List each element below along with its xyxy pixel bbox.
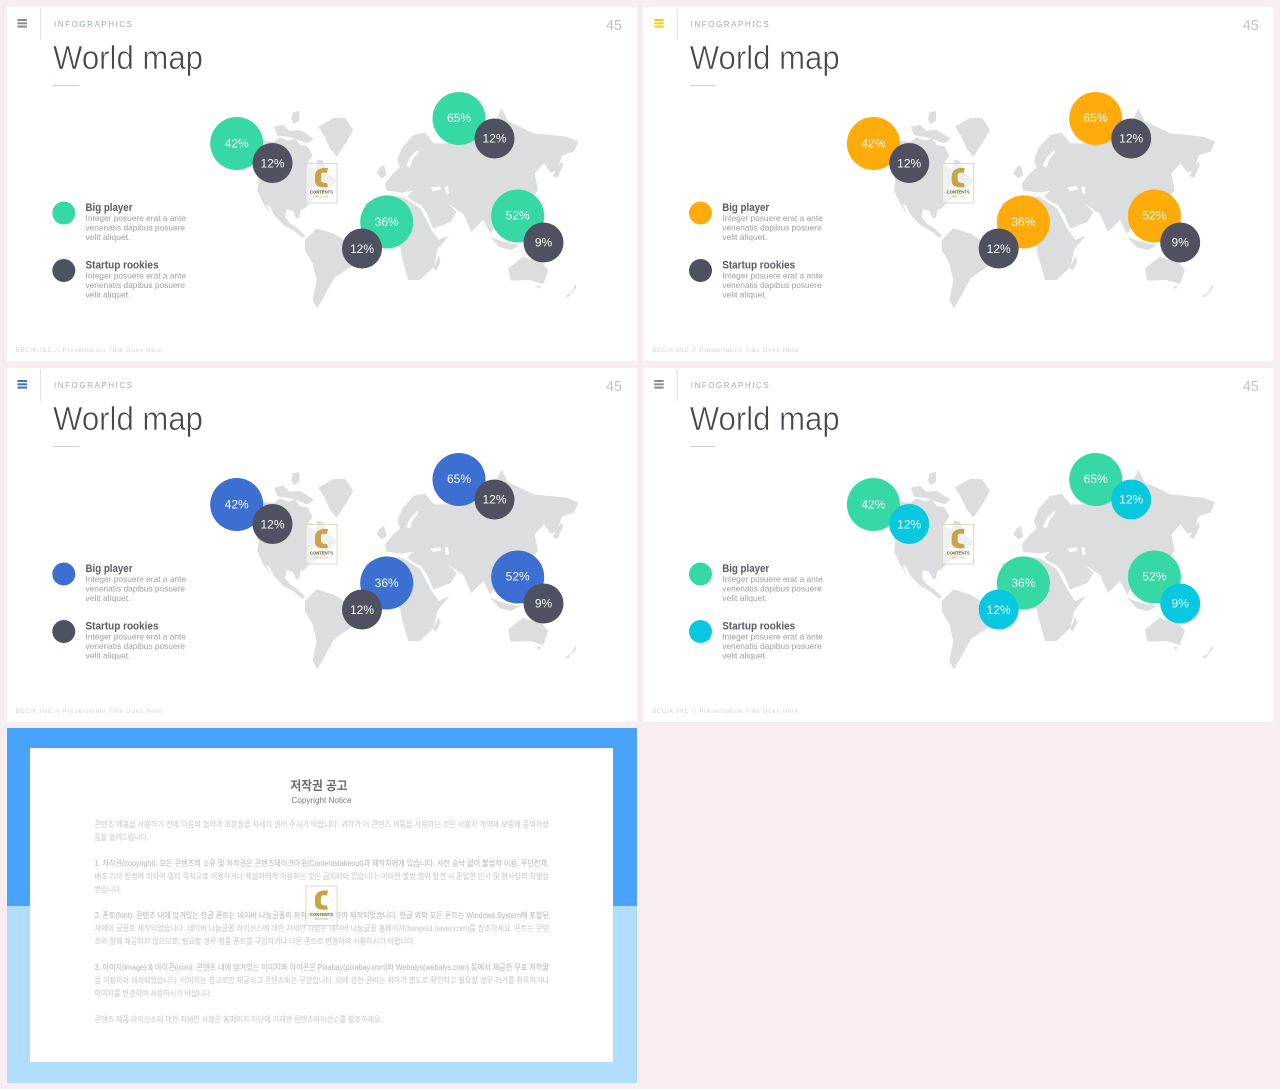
- panel: copyright notice: [7, 728, 637, 1083]
- page number: 45: [1243, 378, 1259, 395]
- section label: INFOGRAPHICS: [691, 20, 769, 29]
- map bubbles: [847, 453, 1200, 630]
- legend: venenatis dapibus posuere: [722, 280, 822, 290]
- icon: menu: [18, 19, 27, 28]
- map bubbles: 9%: [535, 236, 553, 250]
- map bubbles: 12%: [350, 603, 374, 617]
- panel: green and cyan slide: [643, 368, 1274, 722]
- heading: World map: [690, 39, 840, 76]
- map bubbles: [847, 92, 1200, 268]
- map bubbles: 42%: [225, 136, 249, 150]
- legend: velit aliquet.: [86, 593, 130, 603]
- legend: Integer posuere erat a ante: [86, 632, 186, 642]
- notice body text: 3. 이미지(image) & 아이콘(icon): 콘텐츠 내에 담겨있는 이미지와 아이콘은 Pixabay(pixabay.com)와 Webalys(webalys.com) 등에서 제공한 무료 저작물: [94, 962, 549, 972]
- footer: BECIK.INC // Presentation Title Goes Here: [16, 709, 162, 715]
- map bubbles: 12%: [1119, 492, 1144, 506]
- world map: [253, 470, 578, 669]
- legend: venenatis dapibus posuere: [86, 222, 185, 232]
- map bubbles: 65%: [447, 472, 471, 486]
- legend: venenatis dapibus posuere: [722, 222, 822, 232]
- legend: [52, 562, 186, 660]
- legend: venenatis dapibus posuere: [86, 641, 185, 651]
- map bubbles: [210, 453, 563, 630]
- legend: Big player: [722, 202, 770, 214]
- legend: [689, 562, 823, 660]
- footer: BECIK.INC // Presentation Title Goes Here: [652, 709, 799, 715]
- notice body text: 음을 알려드립니다.: [94, 832, 148, 842]
- legend: Integer posuere erat a ante: [722, 632, 823, 642]
- legend: Startup rookies: [722, 260, 795, 272]
- legend: Big player: [86, 202, 133, 214]
- legend: velit aliquet.: [722, 593, 767, 603]
- notice body text: 배포 기타 방법에 의하여 영리 목적으로 이용하거나 제삼자에게 이용하는 것은 금지되어 있습니다. 이러한 불법 행위 발견 시 준엄한 민사 및 형사상의 처벌을: [94, 871, 549, 881]
- map bubbles: 52%: [506, 570, 530, 584]
- heading: World map: [690, 400, 840, 437]
- section label: INFOGRAPHICS: [691, 381, 769, 390]
- notice body text: 1. 저작권(copyright): 모든 콘텐츠의 소유 및 저작권은 콘텐츠테이크아웃(Contentstakeout)과 제작자에게 있습니다. 사전 승낙 없이 불법적 이용, 무단전재,: [94, 858, 549, 868]
- map bubbles: 52%: [1142, 570, 1167, 584]
- map bubbles: 36%: [1011, 215, 1036, 229]
- watermark: [943, 164, 974, 203]
- notice body text: 을 이용하여 제작되었습니다. 이미지는 참고로만 제공되고 콘텐츠와는 무관합니다. 이에 관한 권리는 귀하가 별도로 확인하고 필요할 경우 허가를 취득하거나: [94, 975, 550, 985]
- map bubbles: 12%: [987, 603, 1011, 617]
- notice body text: [94, 819, 550, 1024]
- map bubbles: [210, 92, 563, 268]
- page number: 45: [606, 17, 622, 34]
- map bubbles: 12%: [987, 242, 1011, 256]
- map bubbles: 65%: [1084, 111, 1108, 125]
- notice body text: 콘텐츠 제품을 사용하기 전에 다음의 협약과 조항들을 자세히 읽어 주시기 바랍니다. 귀하가 이 콘텐츠 제품을 사용하는 것은 사용자 계약과 보증에 동의하셨: [94, 819, 550, 829]
- legend: Startup rookies: [722, 620, 795, 632]
- notice heading: 저작권 공고: [290, 778, 348, 793]
- legend: venenatis dapibus posuere: [722, 641, 822, 651]
- icon: menu: [18, 380, 27, 389]
- panel: green and dark slide: [7, 7, 637, 361]
- map bubbles: 12%: [482, 132, 507, 146]
- legend: Big player: [722, 563, 770, 575]
- map bubbles: 12%: [897, 156, 922, 170]
- map bubbles: 12%: [350, 242, 374, 256]
- legend: venenatis dapibus posuere: [86, 280, 185, 290]
- footer: BECIK.INC // Presentation Title Goes Here: [16, 348, 162, 354]
- map bubbles: 36%: [375, 576, 399, 590]
- legend: Startup rookies: [86, 620, 158, 632]
- notice body text: 받습니다.: [94, 884, 122, 894]
- legend: Integer posuere erat a ante: [86, 213, 186, 223]
- world map: [890, 109, 1215, 308]
- map bubbles: 65%: [1084, 472, 1108, 486]
- map bubbles: 12%: [260, 156, 285, 170]
- map bubbles: 52%: [1142, 208, 1167, 222]
- heading: World map: [53, 400, 203, 437]
- map bubbles: 52%: [506, 208, 530, 222]
- map bubbles: 12%: [1119, 132, 1144, 146]
- notice body text: 츠와 함께 제공되지 않으므로, 필요할 경우 정품 폰트를 구입하거나 다른 폰트로 변경하여 사용하시기 바랍니다.: [94, 936, 416, 946]
- legend: Integer posuere erat a ante: [86, 574, 186, 584]
- notice body text: 2. 폰트(font): 콘텐츠 내에 담겨있는 한글 폰트는 네이버 나눔글꼴의 저작권을 준수하여 제작되었습니다. 한글 외의 모든 폰트는 Windows System에 포함된: [94, 910, 549, 920]
- legend: velit aliquet.: [722, 290, 767, 300]
- watermark: [306, 524, 337, 564]
- heading: World map: [53, 39, 203, 76]
- panel: blue and dark slide: [7, 368, 637, 722]
- map bubbles: 42%: [861, 498, 886, 512]
- map bubbles: 9%: [535, 596, 553, 610]
- legend: velit aliquet.: [86, 232, 130, 242]
- legend: velit aliquet.: [722, 232, 767, 242]
- watermark: [306, 886, 337, 926]
- page number: 45: [1243, 17, 1259, 34]
- legend: Big player: [86, 563, 133, 575]
- legend: venenatis dapibus posuere: [722, 584, 822, 594]
- legend: [689, 202, 823, 300]
- map bubbles: 42%: [225, 498, 249, 512]
- section label: INFOGRAPHICS: [54, 20, 132, 29]
- notice body text: 자체의 글꼴로 제작되었습니다. 네이버 나눔글꼴 라이선스에 대한 자세한 사항은 네이버 나눔글꼴 홈페이지(hangeul.naver.com)를 참조하세요. 폰트는 콘텐: [94, 923, 549, 933]
- panel: orange and dark slide: [643, 7, 1274, 361]
- legend: Integer posuere erat a ante: [86, 270, 186, 280]
- legend: venenatis dapibus posuere: [86, 584, 185, 594]
- legend: velit aliquet.: [86, 290, 130, 300]
- map bubbles: 12%: [482, 492, 507, 506]
- page number: 45: [606, 378, 622, 395]
- section label: INFOGRAPHICS: [54, 381, 132, 390]
- footer: BECIK.INC // Presentation Title Goes Here: [652, 348, 799, 354]
- notice body text: 콘텐츠 제품 라이선스에 대한 자세한 사항은 홈페이지 하단에 기재한 콘텐츠라이선스를 참조하세요.: [94, 1014, 382, 1024]
- world map: [253, 109, 578, 308]
- map bubbles: 36%: [1011, 576, 1036, 590]
- map bubbles: 9%: [1172, 236, 1189, 250]
- legend: Startup rookies: [86, 260, 158, 272]
- watermark: [306, 164, 337, 203]
- icon: menu: [654, 380, 664, 389]
- map bubbles: 12%: [260, 518, 285, 532]
- map bubbles: 65%: [447, 111, 471, 125]
- notice heading: [290, 778, 352, 805]
- legend: Integer posuere erat a ante: [722, 213, 823, 223]
- notice heading: Copyright Notice: [292, 795, 352, 805]
- legend: velit aliquet.: [722, 650, 767, 660]
- legend: velit aliquet.: [86, 650, 130, 660]
- watermark: [943, 524, 974, 564]
- map bubbles: 12%: [897, 518, 922, 532]
- map bubbles: 36%: [375, 215, 399, 229]
- world map: [890, 470, 1215, 669]
- legend: [52, 202, 186, 300]
- legend: Integer posuere erat a ante: [722, 574, 823, 584]
- legend: Integer posuere erat a ante: [722, 270, 823, 280]
- map bubbles: 42%: [861, 136, 886, 150]
- map bubbles: 9%: [1172, 596, 1189, 610]
- icon: menu: [654, 19, 664, 28]
- notice body text: 이미지를 변경하여 사용하시기 바랍니다.: [94, 988, 212, 998]
